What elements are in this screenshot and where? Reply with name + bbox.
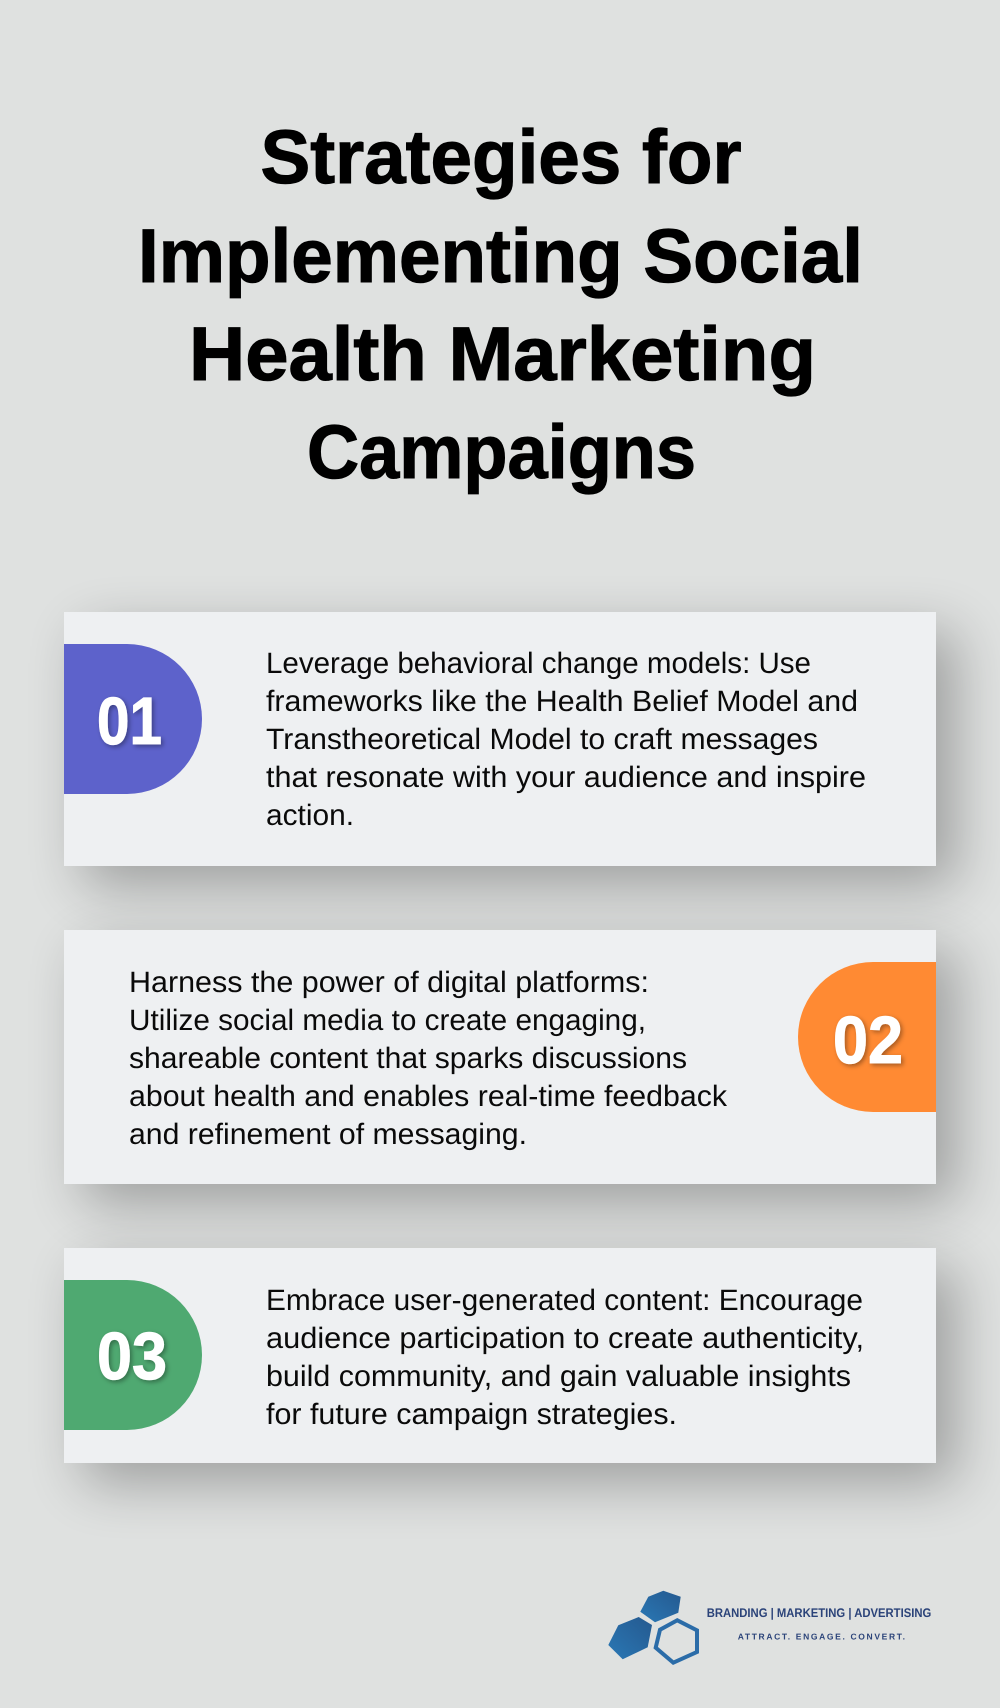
logo xyxy=(608,1591,931,1663)
badge: 02 xyxy=(798,962,936,1112)
text: strategy 01 xyxy=(266,647,866,832)
panel: strategy 02 xyxy=(64,930,956,1204)
badge: 01 xyxy=(64,644,202,794)
logo tagline xyxy=(707,1606,931,1641)
text: strategy 01: Transtheoretical Model to craft messages xyxy=(266,723,818,756)
text: strategy 01: action. xyxy=(266,799,354,832)
title: Implementing Social xyxy=(138,214,863,299)
badge: 03 xyxy=(64,1280,202,1430)
logo tagline: ATTRACT. ENGAGE. CONVERT. xyxy=(738,1631,905,1641)
text: strategy 03: Embrace user-generated content: Encourage xyxy=(266,1284,863,1317)
panel: strategy 03 xyxy=(64,1248,956,1483)
badge: 02: 02 xyxy=(833,1003,903,1078)
text: strategy 02: and refinement of messaging. xyxy=(129,1118,527,1151)
text: strategy 02 xyxy=(129,966,727,1151)
text: strategy 03: build community, and gain valuable insights xyxy=(266,1360,851,1393)
logo tagline: BRANDING | MARKETING | ADVERTISING xyxy=(707,1606,931,1620)
title: Health Marketing xyxy=(189,312,816,397)
title xyxy=(138,115,863,495)
text: strategy 01: that resonate with your audience and inspire xyxy=(266,761,866,794)
text: strategy 02: Utilize social media to create engaging, xyxy=(129,1004,646,1037)
text: strategy 01: Leverage behavioral change models: Use xyxy=(266,647,811,680)
title: Strategies for xyxy=(260,115,742,200)
text: strategy 03: audience participation to create authenticity, xyxy=(266,1322,864,1355)
panel: strategy 01 xyxy=(64,612,956,886)
icon: hexagons xyxy=(608,1591,697,1663)
text: strategy 03 xyxy=(266,1284,864,1431)
title: Campaigns xyxy=(307,410,696,495)
text: strategy 02: Harness the power of digital platforms: xyxy=(129,966,649,999)
text: strategy 01: frameworks like the Health Belief Model and xyxy=(266,685,858,718)
text: strategy 02: shareable content that sparks discussions xyxy=(129,1042,687,1075)
text: strategy 02: about health and enables real-time feedback xyxy=(129,1080,727,1113)
badge: 01: 01 xyxy=(97,684,162,759)
badge: 03: 03 xyxy=(97,1319,167,1394)
text: strategy 03: for future campaign strategies. xyxy=(266,1398,677,1431)
